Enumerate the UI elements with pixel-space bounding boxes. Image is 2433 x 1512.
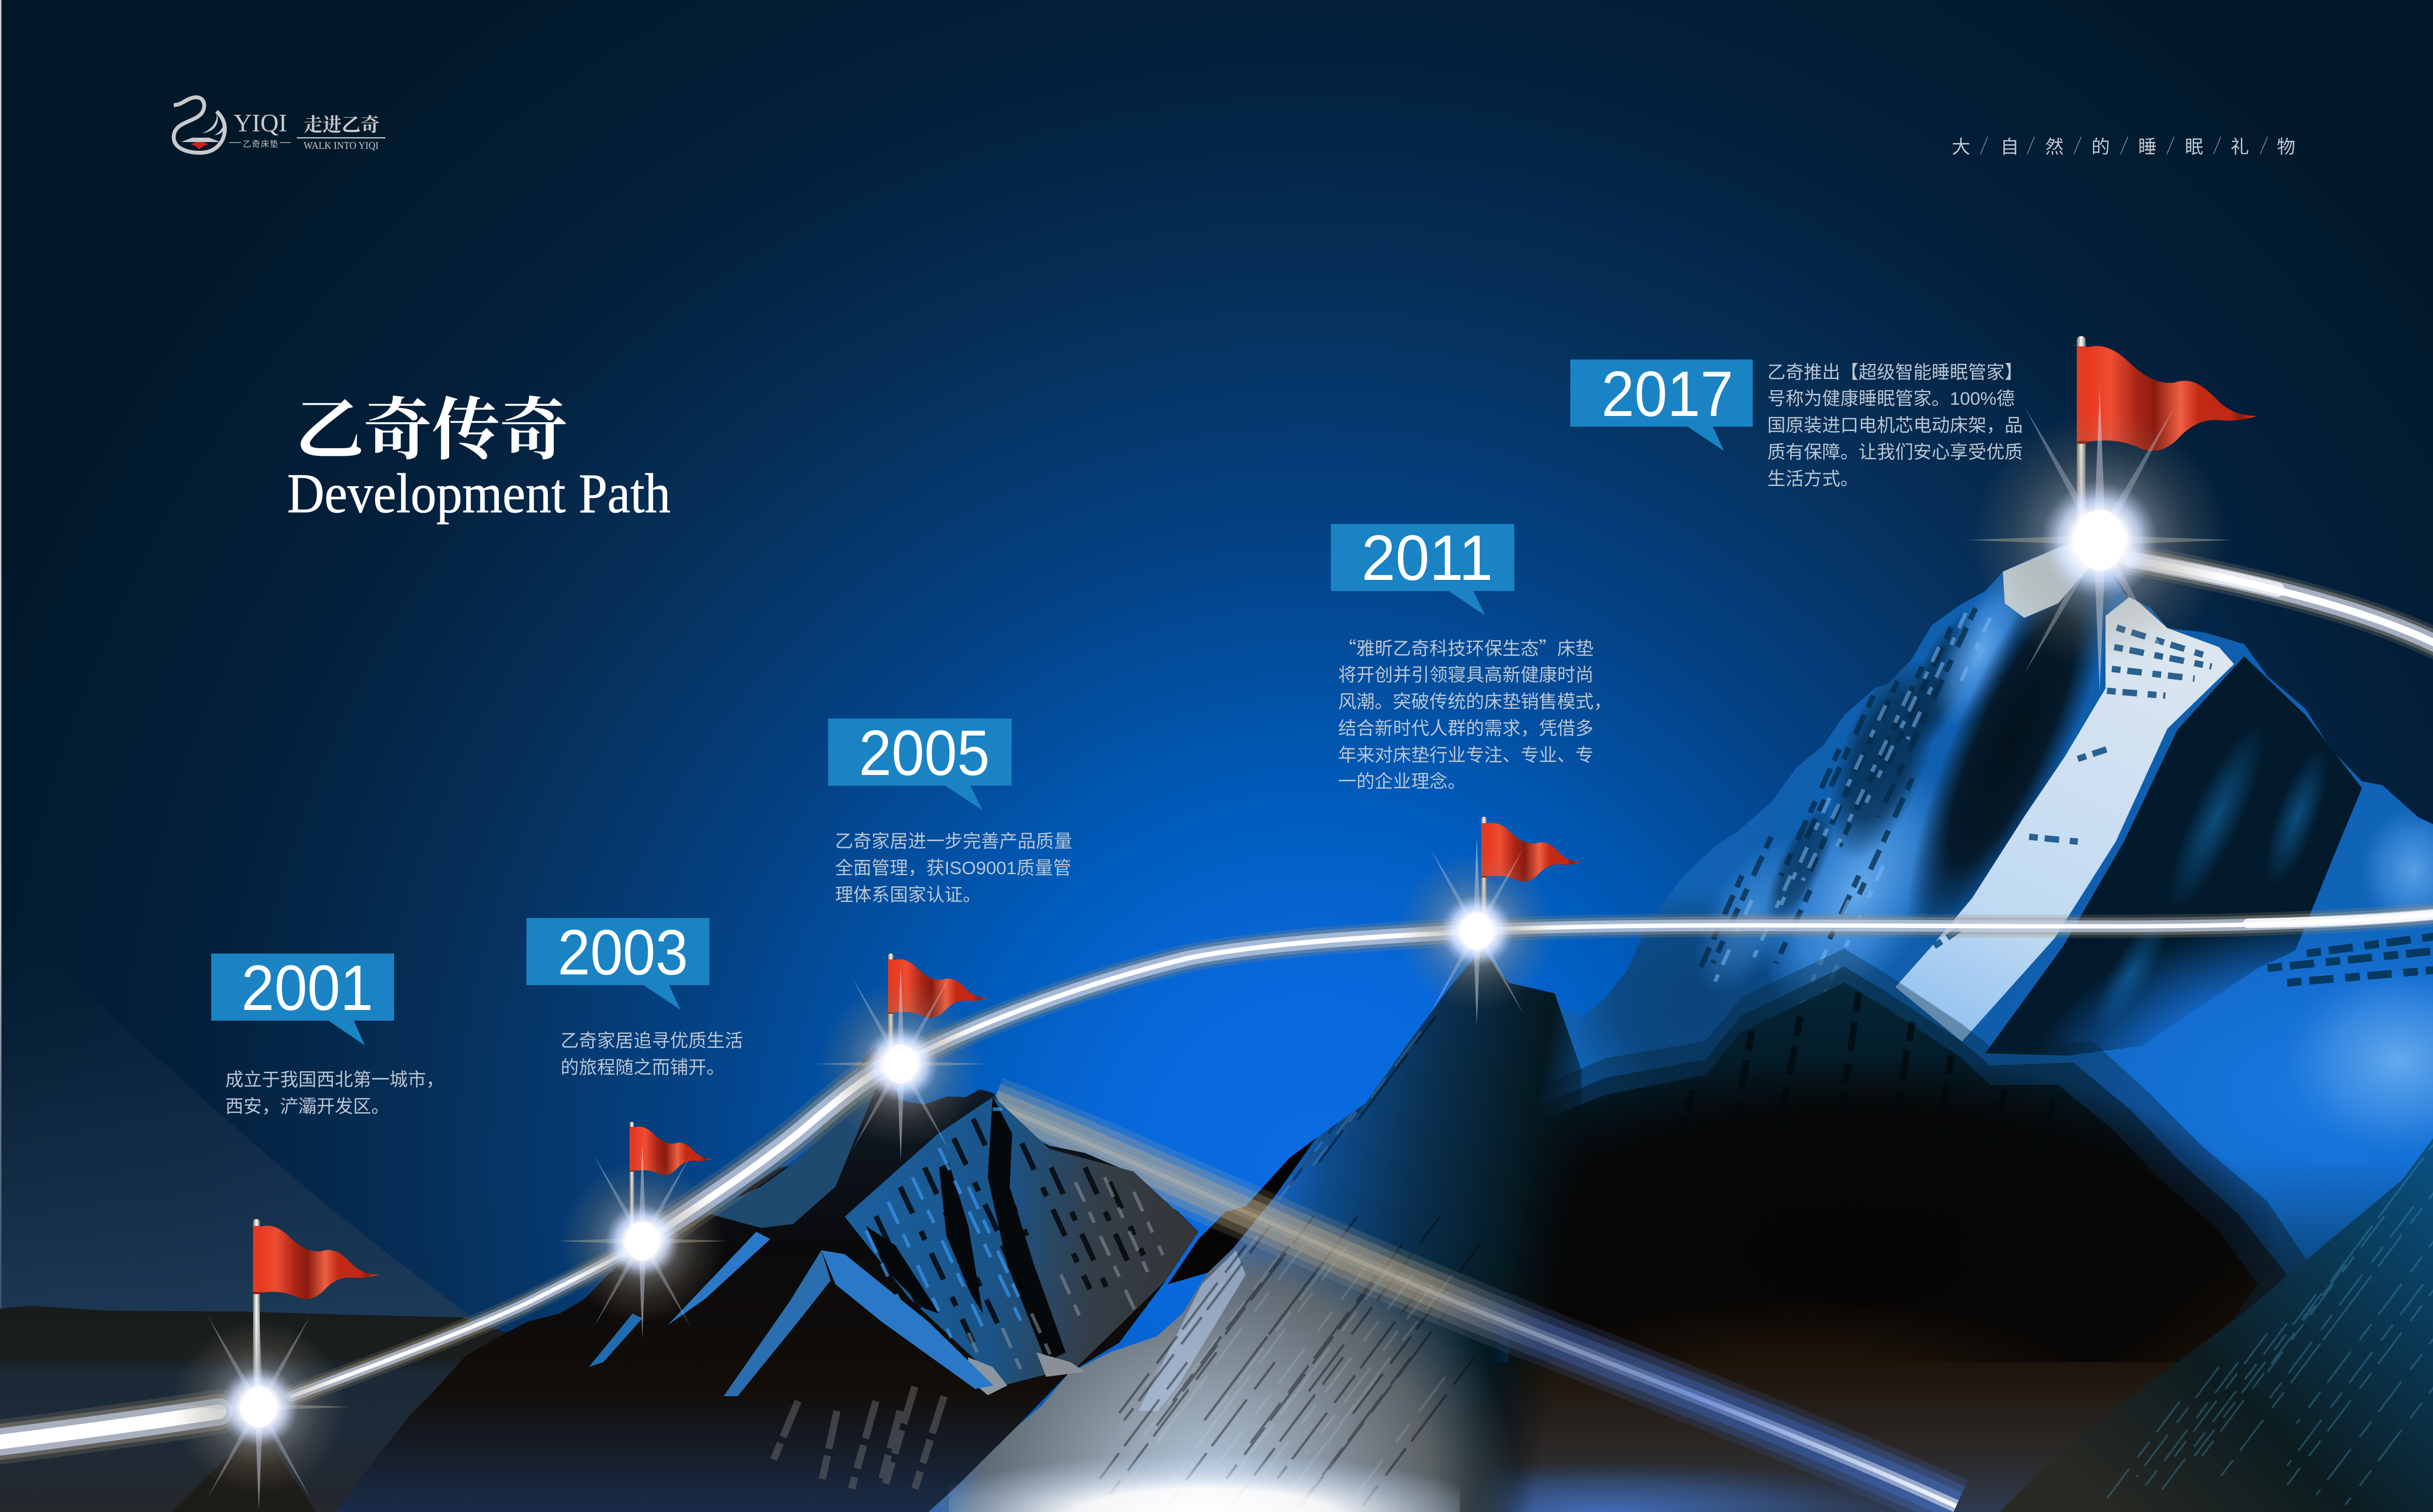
dark arc vignette in lower left sky <box>0 915 467 1343</box>
logo sub text: 乙奇床垫 <box>243 140 279 149</box>
title chinese: 乙奇传奇 <box>295 393 568 468</box>
soft outer ridge edge <box>1508 949 2316 1411</box>
mountain: peak under 2005 flag <box>335 1046 1198 1512</box>
lit rock face <box>845 1097 1198 1386</box>
left edge hairline <box>0 0 1 1512</box>
mountain: dark front ridge <box>1314 949 2316 1512</box>
tagline: 大自然的睡眠礼物 <box>1952 137 2295 158</box>
milestone 2011 <box>1331 522 1612 792</box>
lower right brush texture <box>2107 1119 2433 1505</box>
lower left shadow <box>1577 898 1799 1083</box>
small rock under first peak <box>171 1425 316 1512</box>
icon: swan emblem <box>174 97 225 153</box>
path mid band <box>0 559 2433 1442</box>
description 2005: 理体系国家认证。 <box>835 884 981 905</box>
silhouette <box>335 1046 1198 1512</box>
left slope dark patches <box>1805 643 1961 875</box>
description 2017: 号称为健康睡眠管家。100%德 <box>1767 388 2015 409</box>
description 2011: 结合新时代人群的需求，凭借多 <box>1338 718 1594 738</box>
right dark face <box>1985 656 2362 1056</box>
year 2011: 2011 <box>1362 522 1493 594</box>
ridge streaks <box>1669 992 2053 1182</box>
brown lower haze <box>1499 1299 2102 1484</box>
left face light streaks <box>1708 613 1990 1007</box>
blotch line above bright slope <box>2268 934 2433 983</box>
milestone 2017 <box>1570 358 2023 489</box>
right shoulder <box>2360 808 2433 934</box>
grey lower slope <box>895 1187 1518 1512</box>
mountain: lower right slope <box>1999 1104 2433 1512</box>
year 2001: 2001 <box>241 952 373 1024</box>
lower right bright slope <box>2024 915 2433 1275</box>
blue ridge highlights <box>589 1232 994 1396</box>
path thick summit start <box>2131 559 2277 590</box>
description 2003: 乙奇家居追寻优质生活 <box>561 1030 743 1051</box>
flag 2011 with pole and glow <box>1394 817 1582 1026</box>
rock face blue streaks <box>866 1109 1022 1338</box>
milestone 2003 <box>527 917 743 1078</box>
description 2011: 将开创并引领寝具高新健康时尚 <box>1338 665 1594 685</box>
logo dashes <box>229 142 291 143</box>
distant shore and water <box>0 1306 535 1512</box>
flag 2003 with pole and glow <box>557 1122 728 1338</box>
central dark strip <box>1870 512 2154 967</box>
logo slogan cn: 走进乙奇 <box>304 115 380 136</box>
path inner halo <box>0 559 2433 1442</box>
black gullies <box>866 1097 1066 1362</box>
snow peak base <box>1560 548 2433 1302</box>
black ravine mass <box>1431 1056 2287 1474</box>
milestone 2005 <box>828 717 1072 905</box>
ridge lower fill <box>1460 1362 2248 1512</box>
description 2017: 乙奇推出【超级智能睡眠管家】 <box>1767 362 2023 382</box>
glow at lower front ridge <box>1314 1411 1898 1512</box>
callout badge 2005 <box>828 719 1012 810</box>
ridge body <box>1508 967 2287 1411</box>
snow band <box>1895 595 2234 1042</box>
ridge core <box>1508 983 2258 1411</box>
path thick right end <box>2248 912 2433 923</box>
left slope light patch <box>1770 780 1936 993</box>
mountain: peak under 2011 flag <box>895 949 1581 1512</box>
blue lit slope <box>925 949 1581 1512</box>
description 2001: 成立于我国西北第一城市， <box>225 1069 444 1090</box>
callout badge 2011 <box>1331 524 1514 615</box>
light ring passing over the lower mountains <box>993 1104 1956 1506</box>
brush texture light <box>1109 1031 1453 1511</box>
black ridge strip <box>1168 1138 1316 1284</box>
title <box>287 393 671 524</box>
summit cap <box>2003 535 2092 618</box>
flag 2005 with pole and glow <box>815 954 989 1161</box>
base fade under slope <box>2092 1158 2433 1411</box>
flag 2001 with pole and glow <box>168 1219 379 1510</box>
callout badge 2017 <box>1570 360 1753 451</box>
description 2017: 质有保障。让我们安心享受优质 <box>1767 442 2023 462</box>
year 2003: 2003 <box>558 917 688 988</box>
grey lower rock <box>966 1357 1007 1395</box>
flag 2017 with pole and glow <box>1966 336 2257 692</box>
right face blue strips <box>2151 715 2282 920</box>
left face rock streaks <box>1698 608 1976 973</box>
rock face black streaks <box>876 1119 1144 1343</box>
mountain: large snow peak <box>1560 544 2433 1298</box>
navy upper ridge <box>705 1063 882 1228</box>
year 2017: 2017 <box>1601 358 1733 430</box>
title english: Development Path <box>287 463 671 524</box>
description 2011: 一的企业理念。 <box>1338 771 1466 792</box>
logo <box>174 97 385 153</box>
milestone 2001 <box>211 952 444 1116</box>
description 2005: 乙奇家居进一步完善产品质量 <box>835 831 1072 851</box>
year 2005: 2005 <box>859 717 990 789</box>
upper rock light patch <box>1915 562 2046 741</box>
callout badge 2003 <box>527 918 709 1009</box>
logo slogan en: WALK INTO YIQI <box>304 140 379 151</box>
description 2001: 西安，浐灞开发区。 <box>225 1096 389 1116</box>
description 2011: “雅昕乙奇科技环保生态”床垫 <box>1338 633 1594 660</box>
pale blue streak <box>1139 1250 1246 1411</box>
description 2017: 生活方式。 <box>1767 468 1859 489</box>
grey lower slope streaks <box>774 1386 944 1489</box>
description 2003: 的旅程随之而铺开。 <box>561 1057 725 1078</box>
rock face grey streaks <box>968 1177 1163 1386</box>
callout badge 2001 <box>211 954 394 1045</box>
logo wordmark: YIQI <box>234 109 287 137</box>
path outer halo <box>0 559 2433 1442</box>
path core <box>0 559 2433 1442</box>
description 2005: 全面管理，获ISO9001质量管 <box>835 858 1071 878</box>
brush texture dark <box>1100 1017 1479 1511</box>
glowing timeline path <box>0 559 2433 1442</box>
description 2011: 年来对床垫行业专注、专业、专 <box>1338 745 1594 765</box>
logo divider <box>297 137 385 138</box>
rock blotches on snow top <box>1934 628 2212 946</box>
description 2011: 风潮。突破传统的床垫销售模式， <box>1338 691 1612 712</box>
description 2017: 国原装进口电机芯电动床架，品 <box>1767 415 2023 435</box>
bottom white glow <box>949 1401 1460 1512</box>
